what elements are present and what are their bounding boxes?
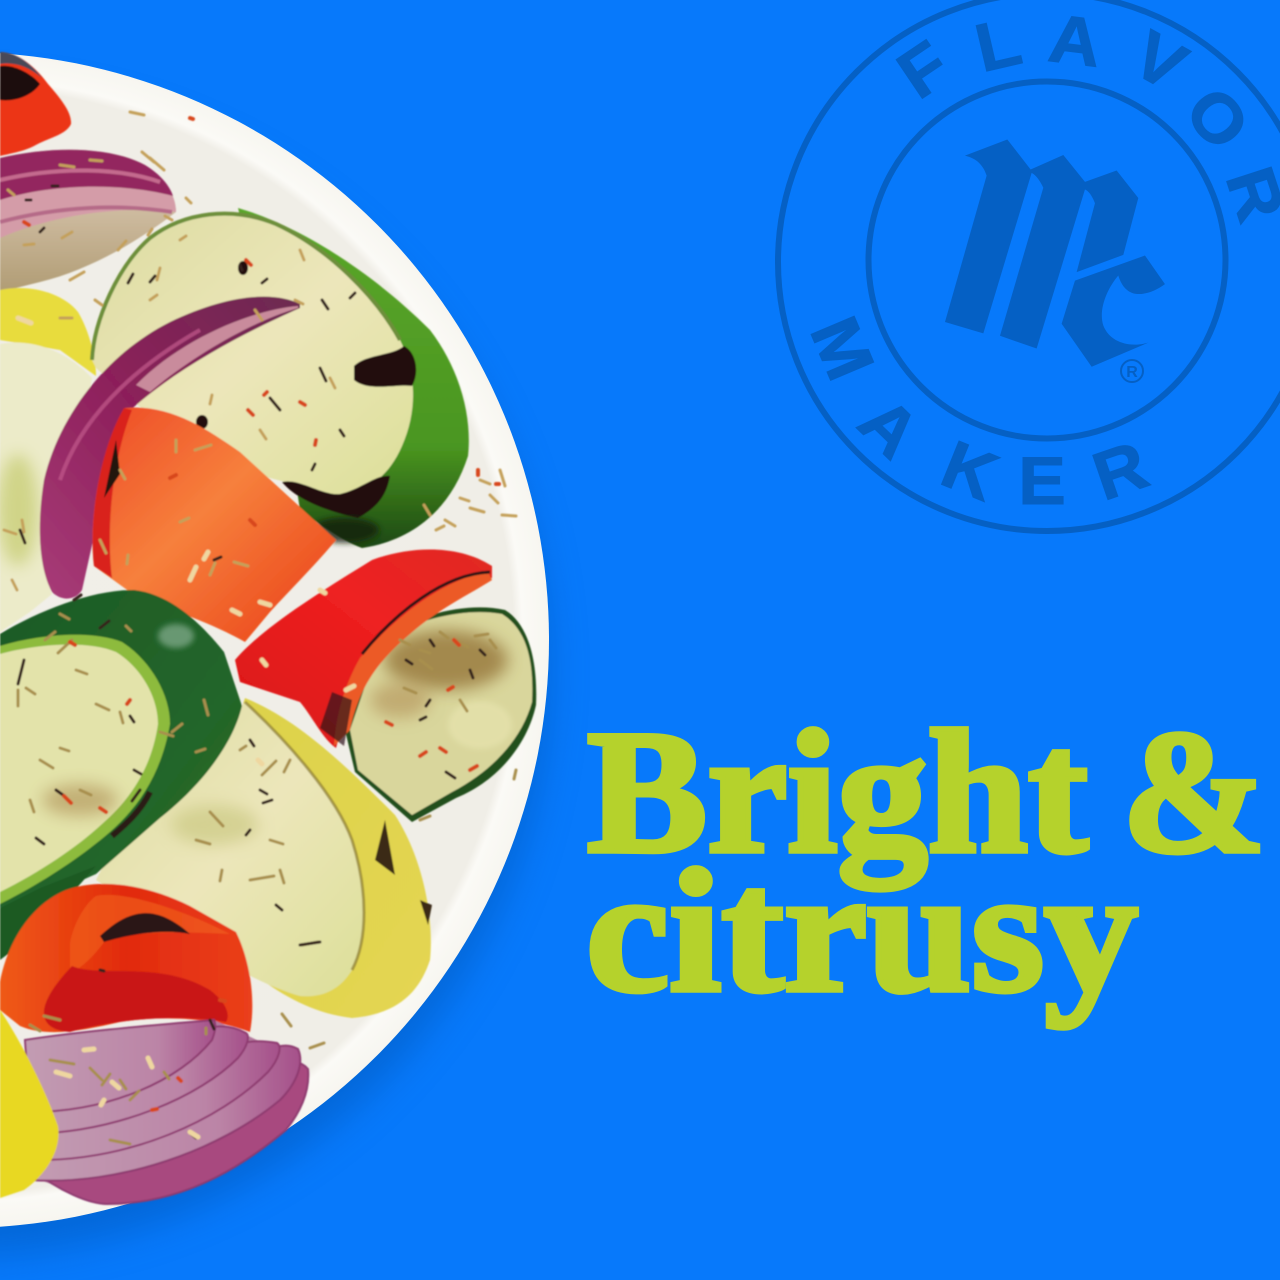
left squash (0, 288, 96, 632)
right red pepper (235, 549, 492, 748)
registered mark: R (1126, 364, 1138, 381)
bottom red pepper (0, 884, 252, 1032)
badge text: MAKER: K (932, 426, 1008, 515)
large zucchini skin (238, 208, 469, 548)
ring 4 (30, 1046, 300, 1181)
dark skin under bottom pepper (0, 866, 96, 960)
badge text: MAKER: A (845, 382, 935, 473)
ring 1 (25, 1020, 215, 1112)
headline (586, 695, 1266, 1029)
badge text: FLAVOR (796, 0, 1280, 519)
red pepper top left (0, 52, 71, 156)
bottom onion (25, 1020, 308, 1204)
logo: Flavor Maker badge (778, 0, 1280, 531)
badge text: MAKER: M (796, 306, 889, 390)
ring backing (25, 1020, 300, 1204)
seasoning flecks (4, 112, 516, 1144)
badge outer ring (778, 0, 1280, 531)
red onion arc (40, 297, 300, 599)
badge text: FLAVOR: F (884, 26, 963, 113)
ring 5 (30, 1062, 308, 1204)
lower right zucchini (345, 607, 536, 822)
badge text: FLAVOR: O (1171, 73, 1265, 164)
headline ampersand: & (1122, 695, 1266, 890)
badge text: FLAVOR: L (968, 3, 1028, 87)
plate shadow (0, 88, 550, 1256)
tomato-coloured pepper (92, 408, 336, 642)
badge text: FLAVOR: V (1120, 16, 1199, 106)
onion top left (0, 150, 176, 292)
badge text: MAKER: E (1018, 443, 1066, 519)
headline word: Bright: Bright (587, 695, 1088, 890)
centre zucchini (0, 590, 242, 908)
registered mark (1121, 360, 1143, 382)
badge inner ring (868, 82, 1226, 438)
grilled vegetables (0, 52, 536, 1204)
char marks (196, 261, 416, 518)
ring 2 (30, 1026, 248, 1134)
ring 3 (30, 1041, 280, 1160)
large zucchini face (92, 214, 416, 543)
headline line 2: citrusy (586, 834, 1138, 1029)
yellow squash (96, 698, 432, 1018)
badge text: MAKER (796, 306, 1157, 519)
badge text: MAKER: R (1083, 426, 1157, 515)
bottom left yellow squash (0, 1010, 59, 1198)
Mc monogram (945, 139, 1165, 367)
plate (0, 52, 549, 1228)
badge text: FLAVOR: A (1045, 0, 1105, 81)
